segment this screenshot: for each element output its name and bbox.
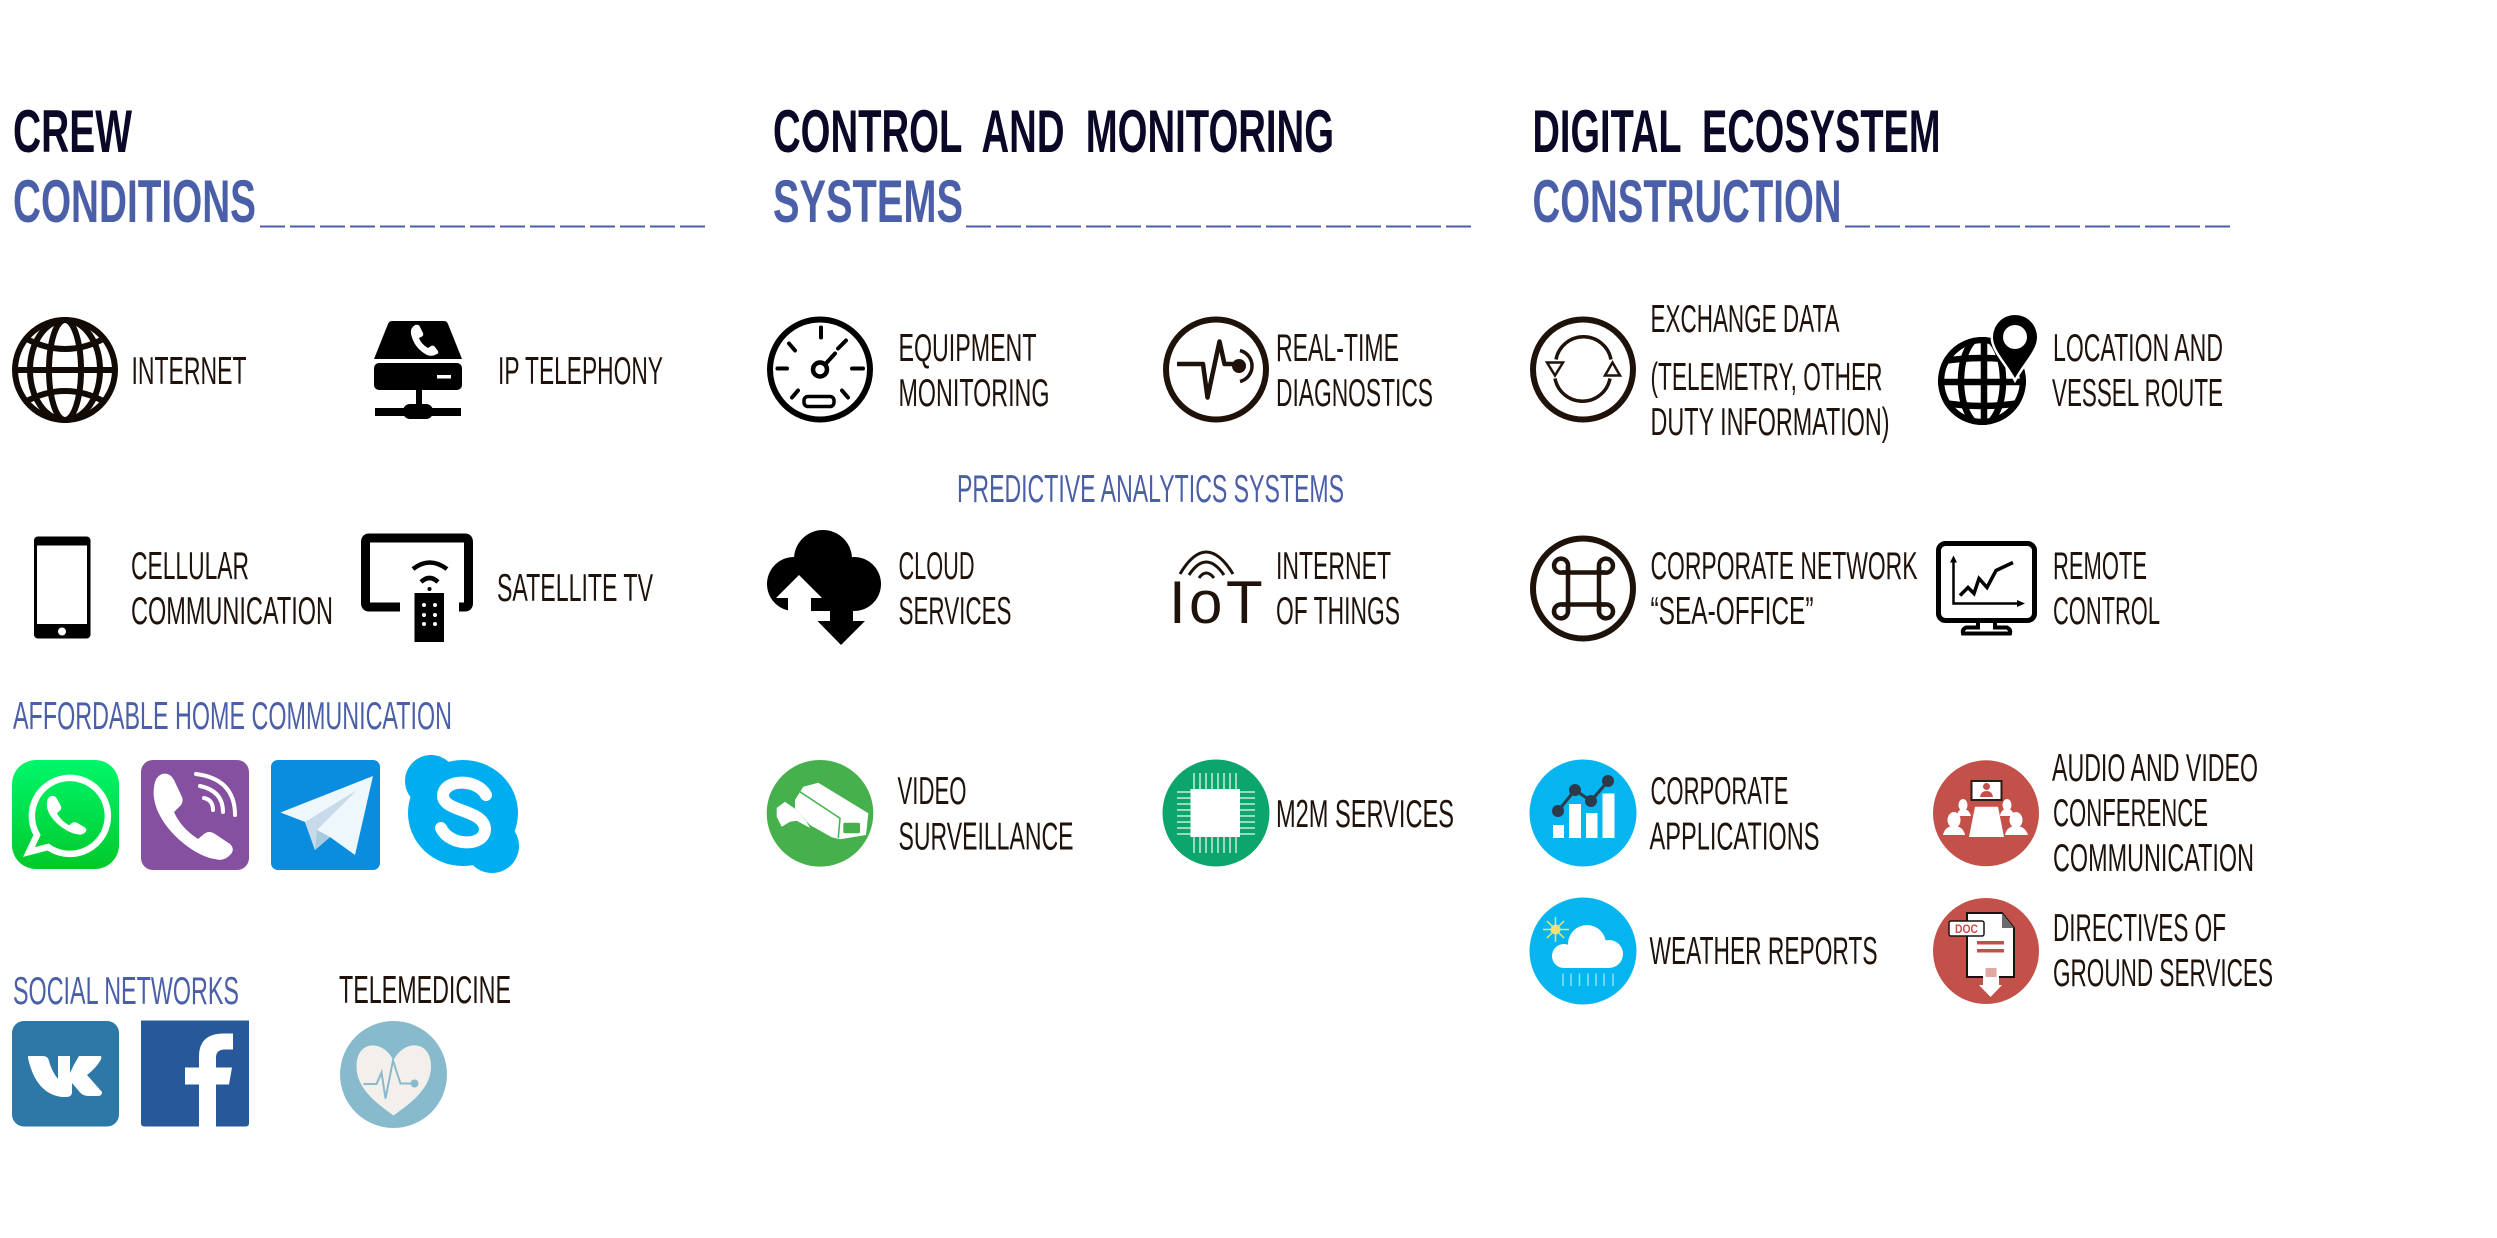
item: real-time diagnostics: DIAGNOSTICS xyxy=(1276,372,1433,415)
item: telemedicine: TELEMEDICINE xyxy=(339,969,511,1012)
item: m2m services: M2M SERVICES xyxy=(1276,793,1454,836)
item: cellular communication xyxy=(34,536,333,638)
icon: globe xyxy=(15,320,115,420)
subheading: social networks: SOCIAL NETWORKS xyxy=(13,970,239,1013)
icon: skype xyxy=(405,755,519,873)
icon: conference xyxy=(1933,760,2039,866)
item: exchange data: (TELEMETRY, OTHER xyxy=(1650,356,1882,399)
item: cloud services: CLOUD xyxy=(898,545,974,588)
item: remote control xyxy=(1938,544,2160,634)
item: exchange data xyxy=(1533,298,1890,444)
item: corporate network: “SEA-OFFICE” xyxy=(1650,590,1814,633)
item: audio and video conference xyxy=(1933,747,2258,880)
item: directives of ground services xyxy=(1933,898,2273,1004)
item: corporate applications: APPLICATIONS xyxy=(1650,816,1820,858)
icon: monitor with chart xyxy=(1938,544,2034,634)
item: location and vessel route xyxy=(1938,315,2223,425)
icon: whatsapp xyxy=(12,760,119,869)
item: internet of things: INTERNET xyxy=(1276,545,1391,588)
icon: telegram xyxy=(271,760,380,870)
item: remote control: REMOTE xyxy=(2053,545,2147,588)
item: video surveillance xyxy=(767,760,1074,867)
item: weather reports xyxy=(1530,898,1878,1004)
item: video surveillance: SURVEILLANCE xyxy=(898,816,1074,858)
item: real-time diagnostics xyxy=(1166,320,1433,420)
heading: digital ecosystem construction xyxy=(1532,98,2230,235)
icon: heart with pulse xyxy=(340,1021,447,1128)
panel: control and monitoring systems xyxy=(767,98,1471,867)
item: ip telephony: IP TELEPHONY xyxy=(498,350,663,393)
item: telemedicine xyxy=(339,969,511,1128)
item: satellite tv xyxy=(366,538,653,642)
panel: crew conditions xyxy=(12,98,705,1128)
item: m2m services xyxy=(1162,760,1454,866)
item: internet of things: OF THINGS xyxy=(1276,590,1400,633)
icon: gauge xyxy=(770,320,870,420)
icon: iot: IoT xyxy=(1169,569,1263,636)
item: exchange data: DUTY INFORMATION) xyxy=(1650,401,1890,444)
item: corporate applications xyxy=(1530,760,1820,866)
panel: digital ecosystem construction xyxy=(1530,98,2273,1004)
item: equipment monitoring: MONITORING xyxy=(898,372,1050,415)
item: directives of ground services: DIRECTIVES OF xyxy=(2053,907,2226,950)
icon: vk xyxy=(12,1021,119,1126)
item: internet: INTERNET xyxy=(132,350,246,393)
item: cellular communication: COMMUNICATION xyxy=(131,590,333,633)
item: equipment monitoring: EQUIPMENT xyxy=(898,327,1036,370)
item: corporate network: CORPORATE NETWORK xyxy=(1650,545,1918,588)
item: audio and video conference: AUDIO AND VIDEO xyxy=(2052,747,2258,790)
icon: viber xyxy=(141,760,249,870)
icon: bar chart xyxy=(1530,760,1636,866)
item: remote control: CONTROL xyxy=(2053,590,2160,633)
item: directives of ground services: GROUND SERVICES xyxy=(2053,952,2273,995)
item: equipment monitoring xyxy=(770,320,1050,420)
item: satellite tv: SATELLITE TV xyxy=(497,567,653,610)
icon: smartphone xyxy=(34,536,90,638)
item: cellular communication: CELLULAR xyxy=(131,545,249,588)
subheading: predictive analytics systems: PREDICTIVE ANALYTICS SYSTEMS xyxy=(957,468,1344,511)
item: weather reports: WEATHER REPORTS xyxy=(1650,930,1878,973)
item: exchange data: EXCHANGE DATA xyxy=(1650,298,1840,341)
icon: command network xyxy=(1533,538,1633,638)
icon: document download xyxy=(1933,898,2039,1004)
item: location and vessel route: LOCATION AND xyxy=(2053,327,2223,370)
icon: diagnostics pulse xyxy=(1166,320,1266,420)
icon: document download: DOC xyxy=(1955,924,1978,936)
icon: facebook xyxy=(141,1020,249,1126)
heading: crew conditions xyxy=(13,98,705,235)
item: cloud services xyxy=(767,530,1012,645)
heading: control and monitoring systems xyxy=(773,98,1471,235)
item: ip telephony xyxy=(374,321,663,419)
heading: crew conditions: CREW xyxy=(13,98,132,165)
item: location and vessel route: VESSEL ROUTE xyxy=(2052,372,2223,415)
item: corporate network xyxy=(1533,538,1918,638)
heading: crew conditions: CONDITIONS xyxy=(13,168,256,235)
subheading: affordable home communication: AFFORDABLE HOME COMMUNICATION xyxy=(13,695,452,738)
item: corporate applications: CORPORATE xyxy=(1650,770,1788,813)
icon: globe with pin xyxy=(1938,315,2037,425)
icon: ip phone server xyxy=(374,321,462,419)
item: video surveillance: VIDEO xyxy=(898,770,966,813)
icon: chip xyxy=(1162,760,1270,866)
icon: weather cloud xyxy=(1530,898,1636,1004)
item: audio and video conference: CONFERENCE xyxy=(2053,792,2208,835)
icon: surveillance camera xyxy=(767,760,873,867)
item: audio and video conference: COMMUNICATION xyxy=(2053,837,2254,880)
item: internet xyxy=(15,320,246,420)
icon: exchange arrows xyxy=(1533,320,1633,420)
item: cloud services: SERVICES xyxy=(898,590,1012,633)
item: real-time diagnostics: REAL-TIME xyxy=(1276,327,1399,370)
icon: tv with remote xyxy=(366,538,468,642)
heading: digital ecosystem construction: DIGITAL ECOSYSTEM xyxy=(1532,98,1940,165)
heading: control and monitoring systems: SYSTEMS xyxy=(773,168,963,235)
heading: control and monitoring systems: CONTROL AND MONITORING xyxy=(773,98,1334,165)
icon: cloud up and down xyxy=(767,530,881,645)
item: internet of things xyxy=(1169,545,1400,636)
heading: digital ecosystem construction: CONSTRUCTION xyxy=(1532,168,1842,235)
